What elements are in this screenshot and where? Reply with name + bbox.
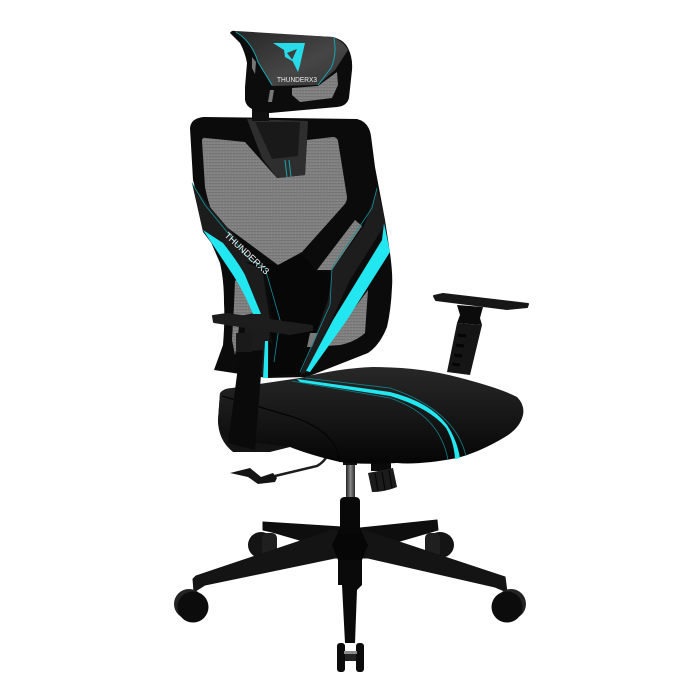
pad — [213, 314, 312, 334]
headrest cushion — [230, 31, 352, 113]
seat — [218, 367, 523, 464]
left mesh slot — [252, 57, 256, 74]
rear right leg — [350, 520, 438, 545]
front right leg — [350, 530, 507, 592]
under-seat mechanism — [218, 393, 290, 452]
left wing panel — [192, 183, 270, 375]
back frame — [190, 117, 392, 378]
adjustment slots — [452, 335, 466, 365]
tilt knob — [368, 458, 397, 492]
height lever — [230, 456, 327, 484]
small mesh slot — [268, 90, 274, 102]
rear left caster — [248, 532, 277, 558]
headrest text: THUNDERX3 — [277, 77, 317, 84]
stitching — [192, 183, 377, 372]
headrest mesh — [292, 72, 338, 102]
right cyan stripe — [306, 223, 390, 372]
headrest — [230, 31, 352, 121]
upper mesh — [202, 137, 347, 265]
post — [447, 323, 482, 375]
front left leg — [193, 530, 350, 592]
logo — [273, 43, 305, 72]
hub — [332, 528, 368, 560]
gas lift column — [340, 458, 360, 534]
right caster — [492, 589, 526, 622]
back logo text: THUNDERX3 — [223, 230, 271, 276]
right lower mesh — [327, 290, 368, 346]
left lower mesh — [232, 279, 254, 355]
left cyan stripe — [203, 230, 261, 314]
small cyan accent — [263, 341, 268, 378]
rear right caster — [425, 532, 454, 558]
rear left leg — [263, 522, 352, 545]
stitching — [236, 32, 335, 85]
small lower mesh — [307, 333, 318, 347]
right wing panel — [280, 188, 385, 376]
seat stitching — [292, 378, 466, 460]
headrest post — [252, 105, 269, 121]
right side mesh strip — [317, 220, 362, 270]
neck panel — [247, 119, 308, 178]
seat seam — [222, 396, 340, 462]
chair back — [190, 117, 392, 378]
carbon panel — [236, 31, 348, 86]
post — [228, 350, 263, 450]
seat cyan stripe — [297, 379, 460, 459]
seat cushion — [218, 367, 523, 464]
neck — [457, 305, 483, 325]
joint — [236, 333, 252, 352]
front column leg — [338, 545, 362, 643]
star base with casters — [174, 520, 526, 672]
pad — [434, 294, 528, 309]
right armrest — [434, 294, 528, 375]
left armrest — [213, 314, 312, 450]
front caster — [337, 643, 364, 672]
central black spine — [244, 254, 332, 376]
left caster — [174, 589, 208, 622]
